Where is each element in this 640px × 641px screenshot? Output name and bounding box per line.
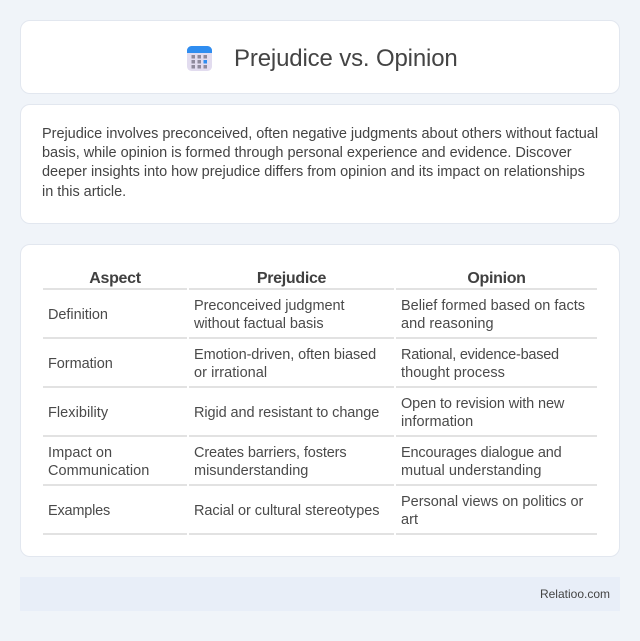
row: formation: or irrational	[194, 365, 267, 381]
row: definition: Belief formed based on facts	[401, 298, 585, 314]
row: examples: Racial or cultural stereotypes	[194, 503, 379, 519]
panel: comparison table	[20, 244, 620, 557]
intro text: Prejudice involves preconceived, often negative judgments about others without factual	[42, 126, 598, 142]
table header: Prejudice	[257, 270, 326, 287]
row: formation: Emotion-driven, often biased	[194, 347, 376, 363]
row: flexibility: information	[401, 414, 473, 430]
row: impact on communication: misunderstanding	[194, 463, 308, 479]
row: formation	[48, 347, 559, 381]
row: examples: Examples	[48, 503, 110, 519]
table header: Aspect	[89, 270, 141, 287]
row: formation: thought process	[401, 365, 505, 381]
icon: calendar	[187, 46, 212, 71]
row: formation: Rational, evidence-based	[401, 347, 559, 363]
row: impact on communication	[48, 445, 562, 479]
row: flexibility	[48, 396, 564, 430]
intro text	[42, 126, 598, 200]
row: definition: without factual basis	[194, 316, 324, 332]
footer bar	[20, 577, 620, 611]
row: examples	[48, 494, 584, 528]
row: examples: art	[401, 512, 418, 528]
intro text: in this article.	[42, 184, 126, 200]
row: definition: Definition	[48, 307, 108, 323]
title: Prejudice vs. Opinion	[234, 45, 458, 72]
row: definition: Preconceived judgment	[194, 298, 344, 314]
intro text: basis, while opinion is formed through personal experience and evidence. Discover	[42, 145, 572, 161]
table header	[89, 270, 526, 287]
row: impact on communication: Encourages dialogue and	[401, 445, 562, 461]
row: impact on communication: mutual understanding	[401, 463, 541, 479]
panel: introduction	[20, 104, 620, 224]
row: examples: Personal views on politics or	[401, 494, 583, 510]
footer credit: Relatioo.com	[540, 587, 610, 601]
row: flexibility: Flexibility	[48, 405, 108, 421]
row: impact on communication: Impact on	[48, 445, 112, 461]
intro text: deeper insights into how prejudice differs from opinion and its impact on relationships	[42, 164, 585, 180]
row: definition	[48, 298, 585, 332]
row: definition: and reasoning	[401, 316, 494, 332]
panel: title card	[20, 20, 620, 94]
row: impact on communication: Creates barriers, fosters	[194, 445, 347, 461]
row: flexibility: Open to revision with new	[401, 396, 564, 412]
row: impact on communication: Communication	[48, 463, 149, 479]
table header: Opinion	[467, 270, 526, 287]
row: flexibility: Rigid and resistant to change	[194, 405, 379, 421]
row: formation: Formation	[48, 356, 113, 372]
